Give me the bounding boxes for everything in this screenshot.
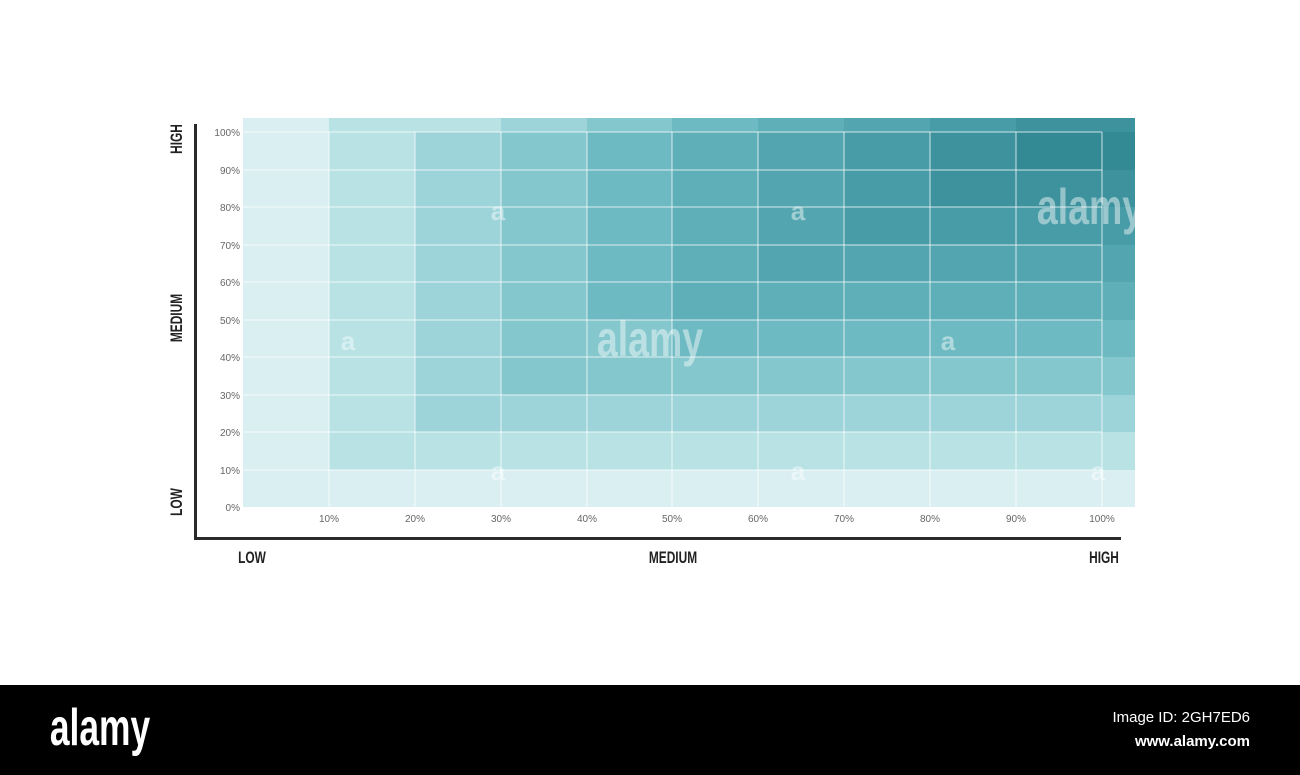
x tick labels: 100% [1089, 514, 1115, 525]
x tick labels [319, 514, 1115, 525]
footer url: www.alamy.com [1134, 733, 1250, 750]
watermarks: a [1091, 456, 1106, 486]
y tick labels: 20% [220, 428, 240, 439]
y tick labels: 10% [220, 466, 240, 477]
row: 90-100% [243, 132, 1135, 170]
watermarks [341, 180, 1144, 486]
row: 0-10% [243, 470, 1135, 507]
watermarks: a [491, 456, 506, 486]
y axis labels [168, 124, 187, 516]
y tick labels: 100% [214, 128, 240, 139]
axes [194, 124, 1121, 540]
x tick labels: 50% [662, 514, 682, 525]
y axis labels: MEDIUM [168, 294, 187, 342]
x tick labels: 80% [920, 514, 940, 525]
y tick labels: 80% [220, 203, 240, 214]
watermarks: a [341, 326, 356, 356]
row: 20-30% [243, 395, 1135, 432]
y tick labels: 70% [220, 241, 240, 252]
x tick labels: 90% [1006, 514, 1026, 525]
row: 10-20% [243, 432, 1135, 470]
row: 80-90% [243, 170, 1135, 207]
y axis labels: HIGH [168, 124, 187, 154]
x axis labels: LOW [238, 549, 266, 568]
row: 30-40% [243, 357, 1135, 395]
row: 40-50% [243, 320, 1135, 357]
y axis labels: LOW [168, 488, 187, 516]
x axis labels: HIGH [1089, 549, 1119, 568]
footer logo: alamy [50, 699, 150, 757]
row: 70-80% [243, 207, 1135, 245]
y tick labels: 60% [220, 278, 240, 289]
y tick labels: 40% [220, 353, 240, 364]
footer bar [0, 685, 1300, 775]
y tick labels: 50% [220, 316, 240, 327]
x tick labels: 60% [748, 514, 768, 525]
row: 60-70% [243, 245, 1135, 282]
x tick labels: 30% [491, 514, 511, 525]
watermarks: a [791, 456, 806, 486]
y tick labels [214, 128, 240, 514]
y tick labels: 30% [220, 391, 240, 402]
x axis labels [238, 549, 1119, 568]
y tick labels: 0% [226, 503, 240, 514]
watermarks: alamy [597, 312, 704, 367]
row: 50-60% [243, 282, 1135, 320]
x axis labels: MEDIUM [649, 549, 697, 568]
watermarks: a [491, 196, 506, 226]
x tick labels: 10% [319, 514, 339, 525]
x tick labels: 40% [577, 514, 597, 525]
watermarks: a [791, 196, 806, 226]
watermarks: a [941, 326, 956, 356]
footer image id: Image ID: 2GH7ED6 [1112, 709, 1250, 726]
x tick labels: 70% [834, 514, 854, 525]
x tick labels: 20% [405, 514, 425, 525]
row: top band [243, 118, 1135, 132]
heatmap grid [243, 118, 1135, 507]
y tick labels: 90% [220, 166, 240, 177]
watermarks: alamy [1037, 180, 1144, 235]
